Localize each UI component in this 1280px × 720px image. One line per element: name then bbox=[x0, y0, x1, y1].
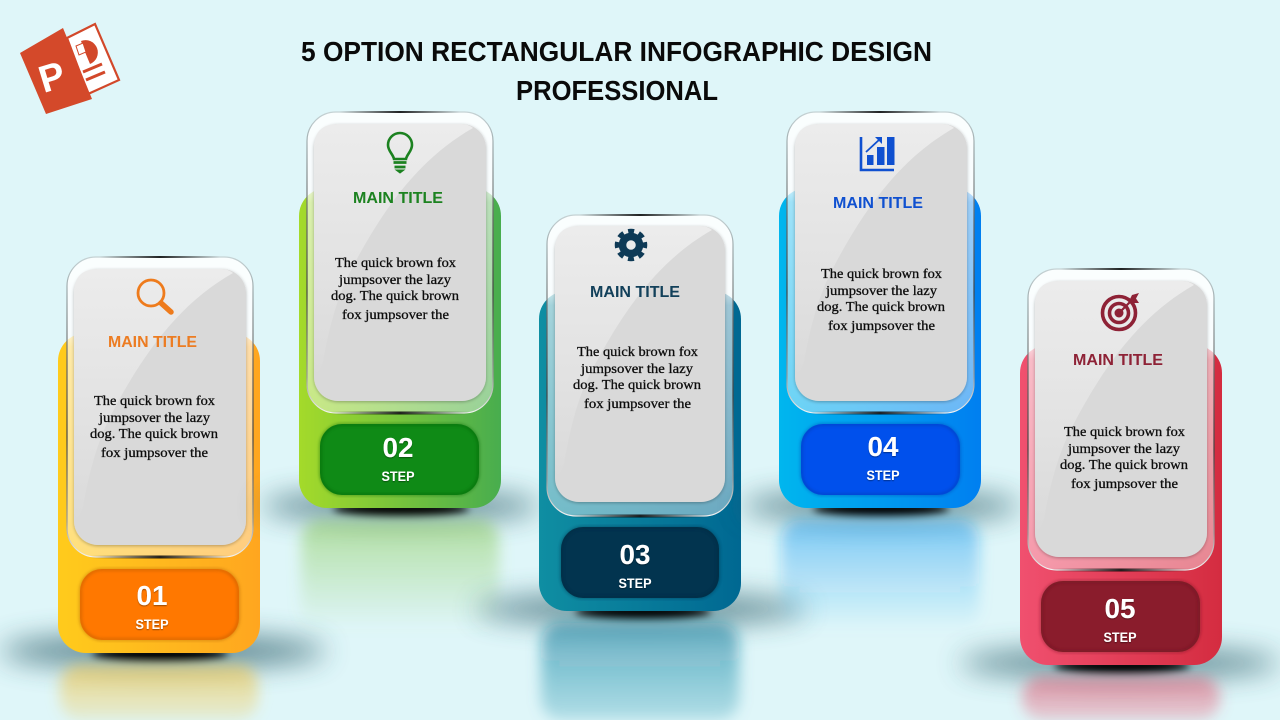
body text: jumpsover the lazy bbox=[98, 411, 210, 426]
body text: fox jumpsover the bbox=[101, 446, 208, 461]
icon: PowerPoint logo bbox=[20, 24, 119, 114]
heading: MAIN TITLE bbox=[833, 195, 923, 212]
body text: The quick brown fox bbox=[94, 394, 215, 409]
colored body bbox=[58, 333, 260, 653]
title: PROFESSIONAL bbox=[516, 75, 718, 106]
inner card bbox=[74, 269, 246, 545]
colored body bbox=[539, 291, 741, 611]
body text: jumpsover the lazy bbox=[338, 273, 451, 288]
glass frame bbox=[67, 256, 253, 558]
step badge bbox=[801, 424, 960, 495]
panel: step 04 bbox=[741, 111, 1021, 630]
step badge bbox=[80, 569, 239, 640]
glass frame bbox=[787, 111, 974, 414]
icon: gear bbox=[617, 231, 645, 259]
body text: fox jumpsover the bbox=[584, 397, 691, 412]
title bbox=[301, 36, 932, 106]
panel: step 05 bbox=[960, 268, 1280, 720]
panel: step 03 bbox=[476, 214, 806, 720]
inner card bbox=[555, 226, 725, 502]
body text bbox=[90, 394, 218, 461]
icon: bar chart with arrow bbox=[861, 137, 894, 170]
body text: dog. The quick brown bbox=[331, 289, 459, 304]
panel: step 02 bbox=[261, 111, 541, 630]
step badge: STEP bbox=[1104, 630, 1136, 645]
step badge bbox=[561, 527, 719, 598]
body text: jumpsover the lazy bbox=[1067, 442, 1180, 457]
inner card bbox=[314, 124, 486, 401]
body text: dog. The quick brown bbox=[90, 427, 218, 442]
step badge: 04 bbox=[868, 431, 899, 462]
step badge: STEP bbox=[866, 468, 900, 483]
floor shadow and reflection bbox=[261, 491, 541, 630]
step badge bbox=[320, 424, 479, 495]
step badge: STEP bbox=[382, 469, 414, 484]
heading: MAIN TITLE bbox=[590, 284, 680, 301]
body text: The quick brown fox bbox=[335, 256, 456, 271]
body text: dog. The quick brown bbox=[817, 300, 945, 315]
glass frame bbox=[547, 214, 733, 518]
body text bbox=[573, 345, 701, 412]
floor shadow and reflection bbox=[960, 648, 1280, 720]
body text: fox jumpsover the bbox=[1071, 477, 1178, 492]
heading: MAIN TITLE bbox=[1073, 352, 1163, 369]
body text: The quick brown fox bbox=[821, 267, 942, 282]
icon: light bulb bbox=[388, 133, 412, 173]
glass frame bbox=[307, 111, 493, 414]
colored body bbox=[779, 188, 981, 508]
step badge: 02 bbox=[382, 432, 414, 463]
heading: MAIN TITLE bbox=[353, 190, 443, 207]
step badge: STEP bbox=[618, 576, 652, 591]
glass frame bbox=[1028, 268, 1214, 572]
step badge: 05 bbox=[1104, 593, 1136, 624]
inner card bbox=[1035, 281, 1207, 557]
step badge: 01 bbox=[136, 580, 168, 611]
body text: jumpsover the lazy bbox=[580, 362, 693, 377]
floor shadow and reflection bbox=[0, 634, 326, 720]
floor shadow and reflection bbox=[476, 594, 806, 720]
icon: target with arrow bbox=[1102, 293, 1139, 330]
body text: The quick brown fox bbox=[1064, 425, 1185, 440]
step badge: 03 bbox=[620, 539, 650, 570]
body text: fox jumpsover the bbox=[342, 308, 449, 323]
body text: fox jumpsover the bbox=[828, 319, 935, 334]
colored body bbox=[299, 188, 501, 508]
body text: The quick brown fox bbox=[577, 345, 698, 360]
body text: dog. The quick brown bbox=[1060, 458, 1188, 473]
icon: magnifier bbox=[138, 280, 171, 312]
body text bbox=[1060, 425, 1188, 492]
colored body bbox=[1020, 345, 1222, 665]
body text bbox=[331, 256, 459, 323]
step badge: STEP bbox=[136, 617, 168, 632]
inner card bbox=[795, 124, 967, 401]
panel: step 01 bbox=[0, 256, 326, 720]
step badge bbox=[1041, 581, 1200, 652]
body text: dog. The quick brown bbox=[573, 378, 701, 393]
floor shadow and reflection bbox=[741, 491, 1021, 630]
heading: MAIN TITLE bbox=[108, 334, 197, 351]
body text: jumpsover the lazy bbox=[825, 284, 937, 299]
title: 5 OPTION RECTANGULAR INFOGRAPHIC DESIGN bbox=[301, 36, 932, 67]
icon: PowerPoint logo: P bbox=[34, 54, 71, 102]
body text bbox=[817, 267, 945, 334]
